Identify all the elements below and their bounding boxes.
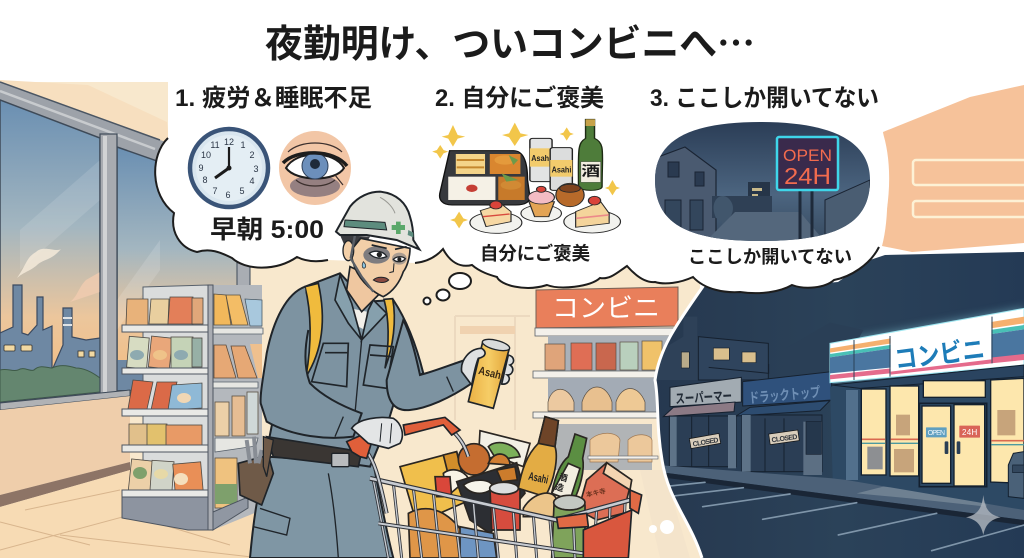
- shelf boards: [122, 325, 209, 497]
- worker with cart: 本キ寺: [585, 486, 607, 499]
- shop 2: ドラックトップ: [748, 384, 821, 406]
- belt and pouch: [267, 437, 362, 467]
- torso: [267, 273, 423, 467]
- icon: rewards bento, drinks and cakes: 酒: [581, 163, 600, 179]
- closed signs: CLOSED: [692, 437, 719, 448]
- icon: clock: 11: [210, 140, 220, 150]
- factory wall right peach panel: [882, 85, 1024, 252]
- worker with cart: 酒: [558, 472, 569, 484]
- closed signs: CLOSED: [771, 434, 798, 444]
- shop 1: [663, 377, 741, 468]
- beer can in hand: Asahi: [477, 365, 505, 383]
- back aisle decoration: [455, 316, 530, 430]
- store interior background: [0, 80, 700, 558]
- floor: [0, 470, 300, 558]
- glove on can: [461, 348, 485, 385]
- pockets: [312, 343, 348, 387]
- icon: clock: 8: [202, 175, 208, 185]
- icon: clock: 9: [198, 163, 204, 173]
- convenience store: OPEN: [928, 430, 945, 437]
- cart basket: [367, 432, 630, 558]
- glove on handle: [352, 417, 402, 448]
- neon sign: OPEN: [783, 146, 832, 165]
- shelf row goods: [126, 297, 203, 495]
- buildings: [657, 348, 668, 380]
- collar and shirt: [351, 308, 367, 330]
- worker with cart: [238, 192, 642, 558]
- face: [350, 238, 410, 297]
- bento: [440, 151, 530, 205]
- worker with cart: Asahi: [527, 471, 549, 487]
- title: 夜勤明け、ついコンビニへ…: [265, 13, 755, 68]
- left arm: [261, 287, 362, 438]
- heading 3: 3. ここしか開いてない: [650, 85, 879, 112]
- label: early morning: 早朝 5:00: [210, 216, 324, 244]
- cans: [530, 138, 552, 182]
- thought bubble: [155, 70, 889, 304]
- chin strap: [351, 235, 373, 292]
- closed signs: [689, 430, 799, 449]
- plates and cakes: [470, 183, 620, 233]
- convenience store: [830, 308, 1024, 510]
- sign text: コンビニ: [552, 293, 660, 323]
- window with factory view: [0, 82, 250, 410]
- smoke: [17, 248, 62, 278]
- icon: clock: 5: [239, 186, 245, 196]
- icon: clock: [190, 129, 268, 207]
- wall below window: [0, 396, 130, 495]
- door signs: [926, 427, 947, 437]
- icon: clock: 12: [224, 137, 234, 147]
- eye shadow: [363, 246, 390, 264]
- pants: [250, 457, 393, 558]
- beer can in hand: [468, 337, 511, 408]
- worker with cart: 造: [554, 482, 565, 494]
- label: reward: 自分にご褒美: [480, 243, 590, 264]
- trailing bubbles: [424, 273, 471, 304]
- konbini sign text: コンビニ: [893, 334, 986, 375]
- head: [340, 235, 410, 297]
- shop 2: [736, 372, 832, 475]
- icon: clock: 1: [240, 140, 246, 150]
- ear: [343, 241, 354, 261]
- icon: clock: 3: [253, 164, 259, 174]
- icon: rewards bento, drinks and cakes: Asahi: [531, 154, 551, 163]
- hair: [340, 235, 370, 255]
- parking lines: [663, 482, 1024, 551]
- icon: rewards bento, drinks and cakes: [432, 119, 620, 233]
- left gondola shelf: [122, 285, 263, 530]
- glow: [830, 308, 1024, 383]
- sparkle watermark: [966, 495, 1001, 535]
- cart handle: [347, 435, 373, 458]
- mini night street with neon sign: [650, 120, 875, 245]
- icon: rewards bento, drinks and cakes: Asahi: [552, 165, 571, 175]
- cart goods: [400, 417, 632, 558]
- neon sign: 24H: [784, 163, 831, 189]
- icon: clock: 6: [225, 190, 231, 200]
- yellow harness: [305, 283, 322, 377]
- side shelf goods: [214, 294, 231, 325]
- icon: clock: 10: [201, 150, 211, 160]
- icon: clock: 4: [249, 176, 255, 186]
- heading 1: 1. 疲労＆睡眠不足: [175, 85, 372, 112]
- night street scene: [649, 244, 1024, 558]
- icon: clock: 2: [249, 150, 255, 160]
- helmet: [336, 192, 419, 249]
- sparkles: [432, 123, 620, 228]
- neon sign: [777, 137, 838, 190]
- right shelf with konbini sign: [533, 287, 690, 558]
- label: only open here: ここしか開いてない: [688, 247, 852, 267]
- windows: [861, 378, 1024, 486]
- icon: tired eye: [279, 131, 351, 205]
- convenience store: 24H: [962, 428, 978, 437]
- sake bottle: [578, 119, 603, 190]
- trash bin: [1008, 452, 1024, 498]
- canopy: [830, 308, 1024, 383]
- sidewalk: [657, 465, 1024, 520]
- neck: [347, 267, 378, 312]
- icon: clock: 7: [212, 186, 218, 196]
- shop 1: スーパーマー: [675, 389, 732, 406]
- right arm: [387, 320, 472, 410]
- heading 2: 2. 自分にご褒美: [435, 84, 604, 112]
- factory: [0, 284, 100, 377]
